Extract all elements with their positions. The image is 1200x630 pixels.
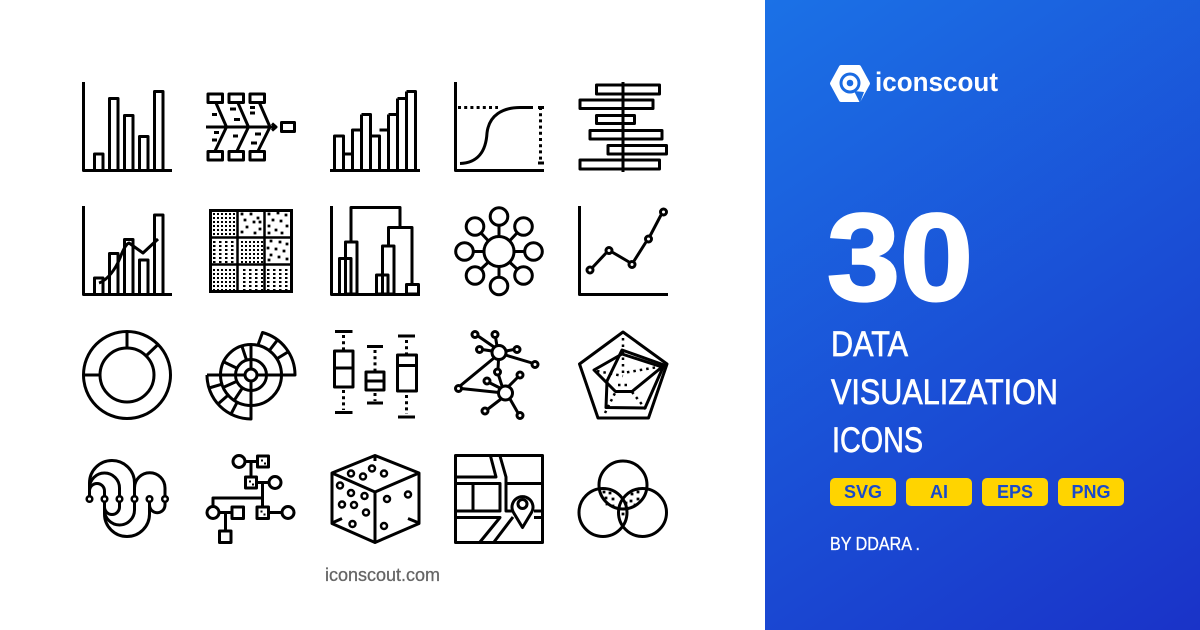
icon: radar chart xyxy=(580,332,667,418)
badge: AI: AI xyxy=(930,482,948,502)
icon: venn diagram xyxy=(579,461,666,536)
icon: dotted cube xyxy=(332,455,419,542)
icon: stepped bar chart xyxy=(330,92,420,170)
badge: EPS xyxy=(982,478,1048,506)
icon: fishbone diagram xyxy=(206,94,294,160)
icon: arc diagram xyxy=(87,460,168,536)
icon: donut chart xyxy=(84,332,170,418)
icon: diverging bar chart xyxy=(580,82,666,172)
format badges xyxy=(830,478,1124,506)
badge: SVG: SVG xyxy=(844,482,882,502)
badge: EPS: EPS xyxy=(997,482,1033,502)
logo: iconscout xyxy=(832,67,998,103)
logo wordmark: iconscout xyxy=(875,67,998,97)
icon: node network xyxy=(456,332,538,418)
badge: AI xyxy=(906,478,972,506)
author credit: BY DDARA . xyxy=(830,534,920,554)
icon: line chart xyxy=(580,206,668,294)
icon: dendrogram chart xyxy=(332,206,420,294)
title: ICONS xyxy=(832,421,923,460)
badge: PNG xyxy=(1058,478,1124,506)
title: DATA xyxy=(831,325,909,364)
icon: dot matrix heatmap xyxy=(210,210,292,292)
title xyxy=(831,325,1058,460)
big number: 30 xyxy=(827,189,973,327)
website label: iconscout.com xyxy=(325,564,440,585)
panel: icon sheet background xyxy=(0,0,765,630)
icon: family tree xyxy=(207,456,294,542)
icon: S curve chart xyxy=(456,82,544,170)
icon: hexagon logo mark xyxy=(832,67,868,103)
icon: bars with trend line xyxy=(84,206,172,294)
title: VISUALIZATION xyxy=(831,373,1058,412)
badge: PNG: PNG xyxy=(1071,482,1111,502)
icon: box plots xyxy=(334,332,416,417)
icon grid xyxy=(84,82,668,542)
icon: bar chart xyxy=(84,82,172,170)
icon: map with pin xyxy=(456,456,543,542)
panel: blue info panel xyxy=(765,0,1200,630)
icon: hub and spoke network xyxy=(456,208,542,295)
icon: rose chart xyxy=(207,332,295,419)
badge: SVG xyxy=(830,478,896,506)
